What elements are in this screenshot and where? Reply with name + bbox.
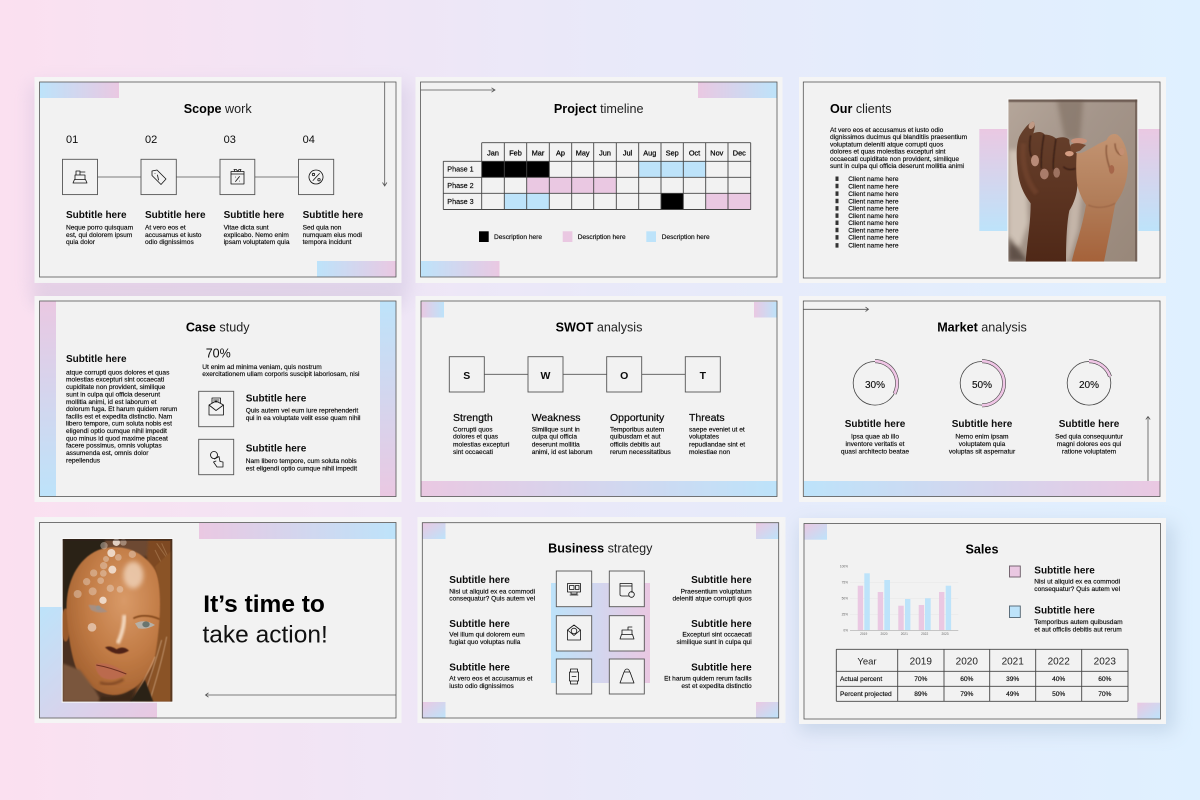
left column text: quo minus id quod maxime placeat [66, 435, 168, 442]
donut 50 percent: Nemo enim ipsam [955, 434, 1009, 441]
client list: Client name here [848, 191, 899, 198]
data table: Percent projected [840, 691, 892, 698]
donut 30 percent: quasi architecto beatae [841, 448, 909, 455]
strength: sint occaecati [453, 449, 493, 456]
intro paragraph: dignissimos ducimus qui blanditiis praesentium [830, 134, 968, 141]
right text column: est et expedita distinctio [681, 683, 752, 690]
feature: click: est eligendi optio cumque nihil impedit [246, 465, 357, 472]
gantt table: Nov [710, 148, 724, 158]
feature: mail: Subtitle here [246, 394, 307, 405]
legend: Description here [494, 234, 542, 241]
data table: 60% [960, 676, 974, 683]
title: Project timeline [554, 102, 644, 116]
icon: gift box discount [231, 170, 244, 184]
icon: percent badge [309, 170, 323, 184]
left column text: atque corrupti quos dolores et quas [66, 369, 170, 376]
donut 50 percent: Subtitle here [952, 419, 1013, 430]
gantt table: Jan [487, 148, 499, 158]
donut 50 percent: voluptas sit aspernatur [949, 448, 1016, 455]
feature: mail: Quis autem vel eum iure reprehenderit [246, 408, 358, 415]
data table: 40% [1052, 676, 1065, 683]
gantt table: Ap [556, 148, 565, 158]
strength: S [463, 370, 470, 382]
weakness: Weakness [532, 412, 581, 424]
left text column: consequatur? Quis autem vel [449, 596, 536, 603]
headline: take action! [202, 622, 328, 649]
icon: price tag [152, 170, 166, 184]
right text column: Subtitle here [691, 575, 752, 586]
right text column: Subtitle here [691, 662, 752, 673]
legend: projected: Temporibus autem quibusdam [1034, 619, 1123, 626]
donut 20 percent [1055, 361, 1124, 455]
opportunity: Opportunity [610, 412, 665, 424]
step 2: Subtitle here [145, 210, 206, 221]
donut 20 percent: 20% [1079, 380, 1099, 391]
left text column: fugiat quo voluptas nulla [449, 639, 521, 646]
client list: Client name here [848, 176, 899, 183]
icon: shopping bag [620, 669, 634, 683]
icon grid [556, 571, 644, 694]
legend: projected: et aut officiis debitis aut rerum [1034, 626, 1122, 633]
icon: cash register [620, 627, 634, 639]
legend: actual [1010, 566, 1121, 593]
gantt table: Jun [599, 148, 611, 158]
icon: browser play [620, 584, 632, 596]
data table: 2022 [1048, 656, 1070, 668]
step 4: tempora incidunt [303, 239, 352, 246]
intro paragraph [830, 127, 968, 170]
stat: 70 percent: Ut enim ad minima veniam, quis nostrum [202, 364, 322, 371]
client list [836, 176, 899, 250]
opportunity: O [620, 370, 628, 382]
donut 20 percent: Sed quia consequuntur [1055, 434, 1124, 441]
gantt table [443, 143, 751, 210]
title: Case study [186, 321, 250, 335]
bar chart: 2019 [860, 632, 867, 636]
icon: envelope [209, 398, 224, 415]
left text column: Nisi ut aliquid ex ea commodi [449, 588, 536, 595]
weakness: deserunt mollitia [532, 441, 580, 448]
left column text: Subtitle here [66, 354, 127, 365]
opportunity: officiis debitis aut [610, 441, 660, 448]
strength: molestias excepturi [453, 441, 510, 448]
weakness: animi, id est laborum [532, 449, 593, 456]
step 1: 01 [66, 134, 78, 146]
arrow: left [206, 693, 396, 697]
client list: Client name here [848, 220, 899, 227]
data table [836, 649, 1128, 701]
threats: T [700, 370, 707, 382]
icon: hand pointer [211, 452, 223, 467]
data table: Year [857, 656, 877, 668]
donut 20 percent: ratione voluptatem [1062, 448, 1117, 455]
data table: 49% [1006, 691, 1019, 698]
data table: 39% [1006, 676, 1019, 683]
donut 30 percent: Subtitle here [845, 419, 906, 430]
data table: 2023 [1094, 656, 1116, 668]
bar chart: 2022 [921, 632, 928, 636]
left column text: cupiditate non provident, similique [66, 384, 166, 391]
left column text: sunt in culpa qui officia deserunt [66, 392, 160, 399]
dark hand [1017, 122, 1077, 262]
step 3: Vitae dicta sunt [224, 224, 269, 232]
data table: Actual percent [840, 676, 882, 683]
right text column: Subtitle here [691, 619, 752, 630]
bar chart: 100% [840, 564, 848, 568]
right text column: Praesentium voluptatum [681, 588, 752, 595]
bar chart: 2021 [901, 632, 908, 636]
gantt table: Phase 2 [447, 181, 474, 190]
threats: voluptates [689, 434, 720, 441]
left text column: At vero eos et accusamus et [449, 676, 533, 683]
left text column [449, 575, 536, 690]
client list: Client name here [848, 227, 899, 234]
weakness: W [541, 370, 551, 382]
stat: 70 percent: exercitationem ullam corporis suscipit laboriosam, nisi [202, 371, 360, 378]
opportunity [607, 357, 672, 456]
data table: 2020 [956, 656, 978, 668]
title: Market analysis [937, 321, 1027, 335]
icon: cash register [73, 171, 87, 183]
feature: mail: qui in ea voluptate velit esse quam nihil [246, 415, 361, 422]
legend: actual: Subtitle here [1034, 566, 1095, 577]
weakness [528, 357, 593, 456]
donut 30 percent: inventore veritatis et [845, 441, 905, 448]
threats: repudiandae sint et [689, 441, 745, 448]
gantt table: Phase 1 [447, 164, 474, 174]
bar chart: 75% [842, 580, 848, 584]
step 1: Subtitle here [66, 210, 127, 221]
left text column: Subtitle here [449, 575, 510, 586]
donut 30 percent: 30% [865, 380, 885, 391]
threats: saepe eveniet ut et [689, 426, 745, 433]
legend: actual: Nisi ut aliquid ex ea commodi [1034, 579, 1121, 586]
bar chart: 2023 [941, 632, 949, 636]
step 1: Neque porro quisquam [66, 224, 134, 232]
data table: 2021 [1002, 656, 1024, 668]
data table: 89% [914, 691, 928, 698]
gantt table: Phase 3 [447, 197, 474, 206]
donut 30 percent [841, 361, 909, 455]
icon: monitor [568, 584, 580, 595]
threats: Threats [689, 412, 725, 424]
data table: 50% [1052, 691, 1065, 698]
photo: linked hands [1007, 98, 1138, 263]
donut 50 percent: voluptatem quia [959, 441, 1006, 448]
right text column: Excepturi sint occaecati [682, 632, 752, 639]
intro paragraph: voluptatum deleniti atque corrupti quos [830, 141, 944, 148]
client list: Client name here [848, 213, 899, 220]
title: Scope work [184, 102, 252, 116]
photo: portrait with bokeh [61, 538, 173, 703]
threats [685, 357, 745, 456]
left column text: assumenda est, omnis dolor [66, 450, 149, 457]
right text column [664, 575, 752, 690]
legend [479, 231, 710, 242]
icon: smart watch [570, 669, 578, 684]
step 4: Sed quia non [303, 224, 342, 232]
donut 50 percent [949, 361, 1016, 455]
stat: 70 percent [202, 346, 360, 378]
left column text: molestias excepturi sint occaecati [66, 377, 165, 384]
gantt table: Aug [643, 148, 656, 158]
data table: 70% [914, 676, 928, 683]
gantt table: Feb [509, 148, 522, 158]
feature: click: Nam libero tempore, cum soluta nobis [246, 458, 357, 465]
right text column: deleniti atque corrupti quos [673, 596, 752, 603]
step 4: 04 [303, 134, 315, 146]
panel: sales [799, 518, 1174, 732]
step 3: ipsam voluptatem quia [224, 239, 290, 246]
step 3: explicabo. Nemo enim [224, 232, 289, 239]
right text column: Et harum quidem rerum facilis [664, 676, 752, 683]
panel: our clients [799, 77, 1166, 283]
gantt table: Oct [689, 148, 700, 158]
step 2 [141, 134, 206, 246]
title: Sales [966, 543, 998, 557]
panel: business strategy [418, 517, 786, 723]
title: Business strategy [548, 542, 653, 556]
step 4: Subtitle here [303, 210, 364, 221]
step 1 [62, 134, 134, 246]
weakness: culpa qui officia [532, 434, 577, 441]
step 2: 02 [145, 134, 157, 146]
panel: scope work [30, 77, 410, 296]
title: Our clients [830, 102, 892, 116]
data table: 79% [960, 691, 974, 698]
legend: Description here [662, 234, 710, 241]
arrow: down [382, 82, 387, 186]
step 1: quia dolor [66, 239, 96, 246]
data table: 2019 [910, 656, 932, 668]
left text column: iusto odio dignissimos [449, 683, 515, 690]
client list: Client name here [848, 235, 899, 242]
left text column: Subtitle here [449, 619, 510, 630]
data table: 70% [1098, 691, 1112, 698]
panel: swot analysis [416, 296, 782, 502]
opportunity: quibusdam et aut [610, 434, 661, 441]
donut 20 percent: magni dolores eos qui [1057, 441, 1122, 448]
panel: call to action [34, 517, 402, 723]
intro paragraph: sunt in culpa qui officia deserunt mollitia animi [830, 163, 965, 170]
threats: molestiae non [689, 449, 730, 456]
step 4: numquam eius modi [303, 232, 363, 239]
arrow: right [420, 88, 495, 92]
step 3 [220, 134, 290, 246]
feature: click: Subtitle here [246, 444, 307, 455]
gantt table: Jul [623, 148, 633, 158]
step 4 [298, 134, 364, 246]
left column text: libero tempore, cum soluta nobis est [66, 421, 172, 428]
gantt table: Dec [733, 148, 746, 158]
title: SWOT analysis [556, 321, 642, 335]
intro paragraph: dolores et quas molestias excepturi sint [830, 149, 946, 156]
right text column: similique sunt in culpa qui [677, 639, 752, 646]
client list: Client name here [848, 183, 899, 190]
icon: open envelope [568, 625, 580, 640]
stat: 70 percent: 70% [206, 346, 231, 360]
opportunity: rerum necessitatibus [610, 449, 672, 456]
client list: Client name here [848, 198, 899, 205]
left column text: facilis est et expedita distinctio. Nam [66, 413, 173, 420]
headline [202, 591, 328, 649]
panel: case study [34, 290, 402, 502]
weakness: Similique sunt in [532, 426, 580, 433]
left column text: facere possimus, omnis voluptas [66, 443, 162, 450]
strength: Corrupti quos [453, 426, 493, 433]
intro paragraph: occaecati cupiditate non provident, similique [830, 156, 959, 163]
panel: market analysis [799, 296, 1166, 502]
data table: 60% [1098, 676, 1112, 683]
bar chart: 25% [842, 612, 848, 616]
donut 20 percent: Subtitle here [1059, 419, 1120, 430]
legend: Description here [578, 234, 626, 241]
light hand [1065, 134, 1128, 262]
gantt table: Mar [532, 148, 545, 158]
legend: actual: consequatur? Quis autem vel [1034, 586, 1121, 593]
strength: Strength [453, 412, 493, 424]
client list: Client name here [848, 206, 899, 213]
legend: projected [1010, 606, 1123, 633]
left text column: Subtitle here [449, 662, 510, 673]
gantt table: Sep [666, 148, 679, 158]
headline: It’s time to [203, 591, 325, 618]
panel: project timeline [416, 77, 782, 283]
donut 50 percent: 50% [972, 380, 992, 391]
strength: dolores et quas [453, 434, 499, 441]
step 2: odio dignissimos [145, 239, 194, 246]
arrow: up [1146, 416, 1150, 481]
left column text [66, 354, 178, 464]
center gradient block [551, 583, 650, 683]
left column text: dolorum fuga. Et harum quidem rerum [66, 406, 178, 413]
gantt table: May [576, 148, 590, 158]
left column text: eligendi optio cumque nihil impedit [66, 428, 167, 435]
bar chart: 0% [843, 628, 848, 632]
strength [449, 357, 510, 456]
feature: mail [199, 391, 361, 427]
step 1: est, qui dolorem ipsum [66, 232, 133, 239]
step 3: Subtitle here [224, 210, 285, 221]
left text column: Vel illum qui dolorem eum [449, 632, 525, 639]
bar chart: 2020 [880, 632, 888, 636]
feature: click [199, 439, 357, 475]
step 3: 03 [224, 134, 236, 146]
legend: projected: Subtitle here [1034, 606, 1095, 617]
left column text: mollitia animi, id est laborum et [66, 399, 157, 406]
step 2: At vero eos et [145, 224, 186, 232]
donut 30 percent: Ipsa quae ab illo [851, 434, 899, 441]
bar chart [840, 564, 958, 636]
arrow: right [803, 307, 868, 312]
opportunity: Temporibus autem [610, 426, 665, 433]
step 2: accusamus et iusto [145, 232, 202, 239]
left column text: repellendus [66, 457, 101, 464]
client list: Client name here [848, 243, 899, 250]
bar chart: 50% [842, 596, 848, 600]
intro paragraph: At vero eos et accusamus et iusto odio [830, 127, 944, 134]
